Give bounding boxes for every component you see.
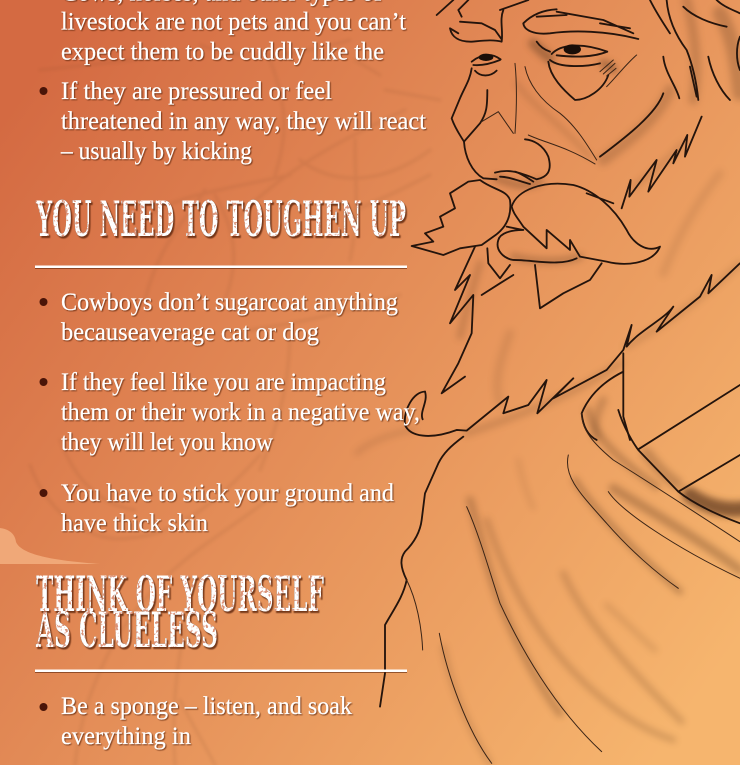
bullet [40, 378, 48, 386]
heading: think of yourself as clueless [36, 565, 324, 659]
nose [452, 68, 497, 179]
bullet [40, 87, 48, 95]
illustration: bearded cowboy [357, 0, 740, 763]
neck line [582, 353, 630, 440]
bullet [40, 298, 48, 306]
soft face and beard shading [357, 0, 740, 453]
face line work [405, 0, 740, 440]
body shading [443, 400, 740, 763]
bullet list: toughen up [40, 289, 420, 537]
moustache [412, 180, 510, 255]
text: impacting: they will let you know [61, 429, 273, 456]
text: livestock not pets: expect them to be cuddly like the [61, 38, 384, 66]
beard outline with curl [405, 247, 740, 436]
text: sponge: Be a sponge – listen, and soak [61, 693, 352, 720]
text: impacting [61, 369, 420, 456]
near pupil [564, 44, 581, 54]
eye bag [548, 60, 608, 100]
near brow [523, 9, 638, 39]
near eye [537, 42, 607, 57]
cheek hatching [600, 60, 616, 76]
faint background sketch [30, 40, 440, 765]
text: pressured: – usually by kicking [60, 138, 252, 165]
text: sugarcoat: Cowboys don’t sugarcoat anything [61, 289, 398, 316]
text: impacting: If they feel like you are impacting [61, 369, 386, 396]
heading: think of yourself as clueless: AS CLUELESS [36, 601, 218, 659]
divider [35, 266, 407, 268]
text: pressured [60, 78, 426, 165]
cheek line and beard hairs [600, 57, 702, 208]
bullet list: livestock [40, 0, 426, 165]
hair [437, 0, 740, 100]
text: thick skin: have thick skin [61, 510, 208, 537]
bullet list: clueless [40, 693, 352, 750]
body line work [380, 385, 740, 763]
text: impacting: them or their work in a negative way, [61, 399, 420, 426]
text: livestock not pets [61, 0, 406, 66]
text: pressured: If they are pressured or feel [61, 78, 332, 105]
text: pressured: threatened in any way, they will react [61, 108, 426, 135]
text: sugarcoat: becauseaverage cat or dog [61, 319, 319, 346]
lip and chin tuft [498, 227, 577, 262]
text: THINK OF YOURSELF [36, 565, 324, 623]
divider [35, 670, 407, 672]
text: sponge: everything in [61, 723, 191, 750]
bullet [40, 489, 48, 497]
bullet [40, 703, 48, 711]
text: livestock not pets: livestock are not pets and you can’t [61, 8, 406, 36]
text: sponge [61, 693, 352, 750]
far eye and brow [450, 10, 503, 42]
cloud shape [0, 528, 100, 564]
text: thick skin [61, 480, 394, 537]
text: sugarcoat [61, 289, 398, 346]
text: thick skin: You have to stick your ground and [61, 480, 394, 507]
far eye pupil [479, 54, 493, 61]
